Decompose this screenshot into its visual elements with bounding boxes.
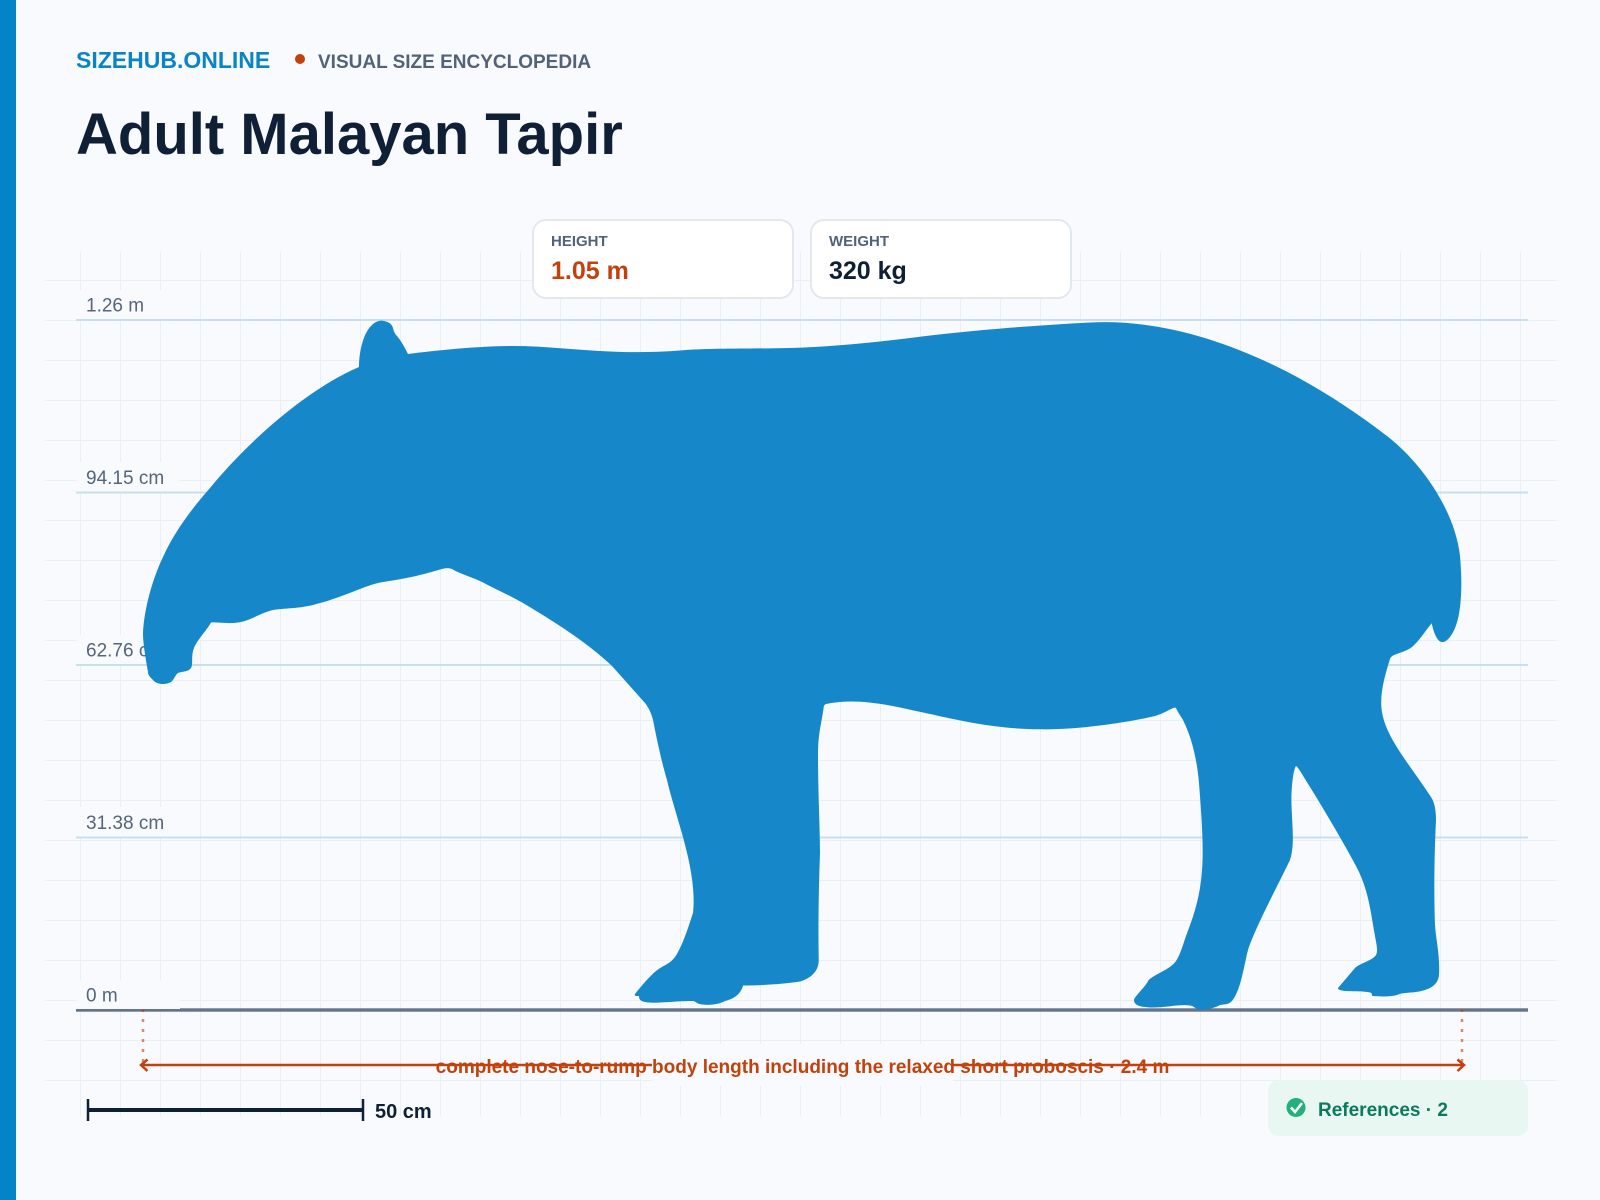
icon: check circle xyxy=(1286,1098,1306,1117)
height level labels: 0 m xyxy=(86,985,118,1006)
scale bar xyxy=(88,1099,432,1123)
stat card: weight xyxy=(811,220,1071,298)
header: brand line xyxy=(76,47,591,73)
left accent bar xyxy=(0,0,16,1200)
stat card: height xyxy=(533,220,793,298)
red dot xyxy=(295,54,305,64)
ground line xyxy=(76,1008,1528,1012)
title: Adult Malayan Tapir xyxy=(76,102,623,167)
references badge xyxy=(1268,1080,1528,1136)
height level lines xyxy=(76,320,1528,838)
stat card: height: HEIGHT xyxy=(551,233,608,250)
height level labels xyxy=(76,290,180,1009)
double arrow xyxy=(141,1060,1464,1071)
dimension label: complete nose-to-rump body length including the relaxed short proboscis · 2.4 m xyxy=(436,1057,1169,1078)
height level labels: 1.26 m xyxy=(86,296,144,316)
scale bar: 50 cm xyxy=(375,1101,432,1123)
tagline: VISUAL SIZE ENCYCLOPEDIA xyxy=(318,52,591,73)
references badge: References · 2 xyxy=(1318,1100,1448,1121)
body length dimension xyxy=(141,1009,1464,1086)
stat card: weight: WEIGHT xyxy=(829,233,889,250)
height level labels: 94.15 cm xyxy=(86,468,164,489)
silhouette: Malayan tapir xyxy=(143,321,1461,1010)
stat card: height: 1.05 m xyxy=(551,257,629,285)
brand name: SIZEHUB.ONLINE xyxy=(76,47,270,73)
label mask xyxy=(652,1044,953,1086)
dotted guide lines xyxy=(143,1009,1462,1063)
height level labels: 62.76 cm xyxy=(86,640,164,661)
height level labels: 31.38 cm xyxy=(86,813,164,834)
stat card: weight: 320 kg xyxy=(829,257,907,285)
